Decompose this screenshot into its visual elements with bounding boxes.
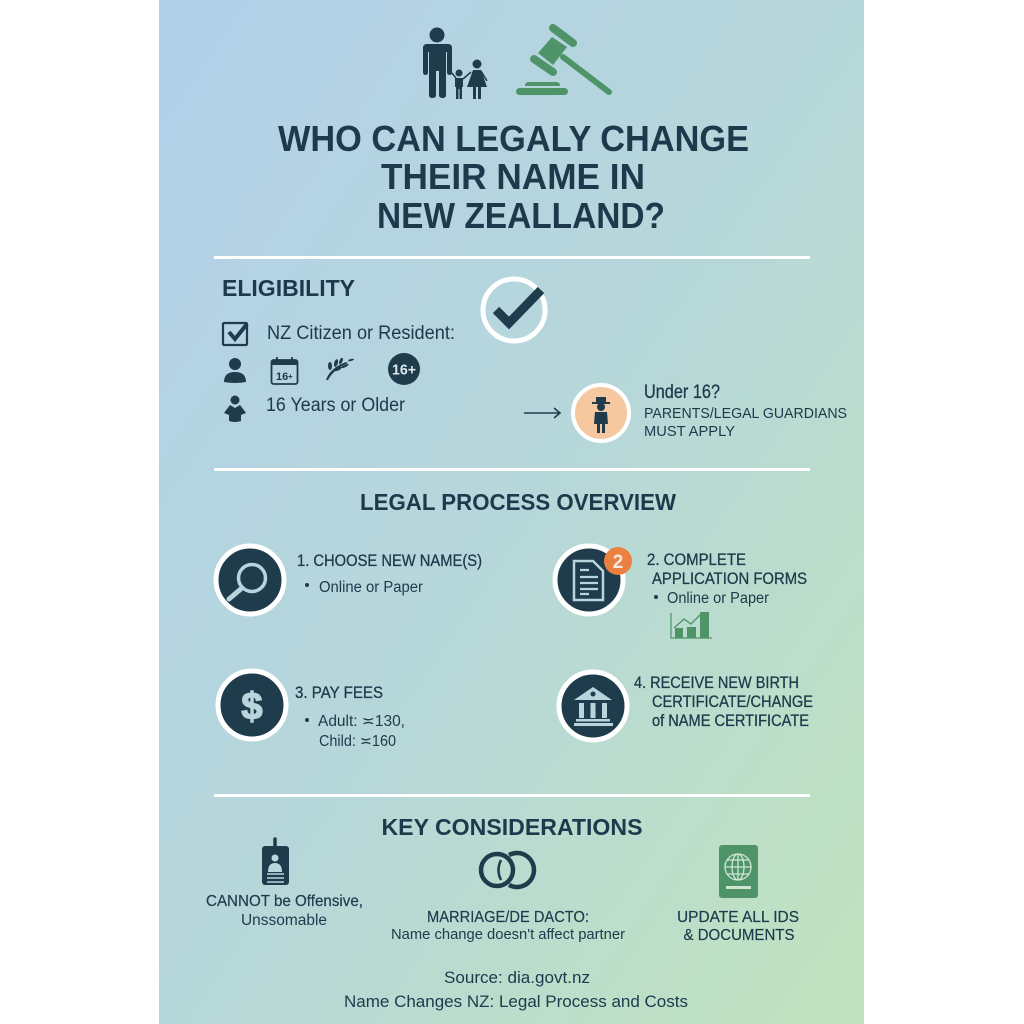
text: step 2: APPLICATION FORMS (652, 570, 807, 588)
text: step 1: 1. CHOOSE NEW NAME(S) (297, 552, 482, 570)
icon: green chart (671, 612, 712, 638)
heading: eligibility: ELIGIBILITY (222, 275, 355, 301)
icon: dollar (218, 671, 286, 739)
icon: child (224, 396, 246, 422)
icon: magnifier (216, 546, 284, 614)
text: cannot (206, 893, 363, 929)
title: WHO CAN LEGALY CHANGE (278, 118, 749, 159)
text: step 2: 2. COMPLETE (647, 551, 746, 569)
background panel (159, 0, 864, 1024)
text: step 4 (634, 674, 813, 730)
text: step 1 (297, 552, 482, 596)
consideration: marriage (391, 853, 625, 943)
text: under 16 (644, 382, 847, 440)
text: marriage: MARRIAGE/DE DACTO: (427, 909, 589, 926)
icon: under 16 child (573, 385, 629, 441)
icon: passport (719, 845, 758, 898)
icon: bank (559, 672, 627, 740)
text: age: 16 Years or Older (266, 395, 406, 416)
heading: legal process overview: LEGAL PROCESS OVERVIEW (360, 489, 676, 515)
consideration: offensive names (206, 839, 363, 929)
badge: 2 (604, 547, 632, 575)
icon: person (224, 358, 246, 383)
icon: rings (481, 853, 534, 887)
consideration: update ids (677, 845, 799, 944)
text: step 1: Online or Paper (319, 579, 423, 596)
badge: 2: 2 (613, 552, 623, 573)
title (278, 118, 749, 236)
icon: dollar: $ (241, 686, 263, 728)
icon: calendar 16 (272, 357, 298, 384)
text: step 4: 4. RECEIVE NEW BIRTH (634, 674, 799, 692)
title: NEW ZEALLAND? (377, 195, 665, 236)
text: step 3 (295, 684, 405, 750)
text: step 4: CERTIFICATE/CHANGE (652, 693, 813, 711)
text: step 3: 3. PAY FEES (295, 684, 383, 702)
step 4 (559, 672, 813, 740)
section: eligibility (222, 275, 455, 422)
icon: document (555, 546, 623, 614)
text: step 3: Adult: ≍130, (318, 713, 405, 730)
text: under 16: Under 16? (644, 382, 720, 403)
icon: id tag (262, 839, 289, 885)
text: marriage: Name change doesn't affect partner (391, 926, 625, 943)
text: update ids (677, 909, 799, 944)
icon: large check (483, 279, 545, 341)
icon: gavel (516, 28, 609, 95)
step 1 (216, 546, 482, 614)
heading: key considerations: KEY CONSIDERATIONS (382, 814, 642, 840)
icon: calendar 16: + (288, 372, 293, 381)
text: step 4: of NAME CERTIFICATE (652, 712, 809, 730)
icon: calendar 16: 16 (276, 371, 288, 383)
badge: 16+: 16+ (392, 362, 416, 378)
step 2 (555, 546, 807, 638)
text: update ids: UPDATE ALL IDS (677, 909, 799, 926)
source footer: Source: dia.govt.nz (444, 968, 590, 987)
icon: family (423, 28, 487, 99)
text: citizen: NZ Citizen or Resident: (267, 323, 455, 344)
text: under 16: MUST APPLY (644, 423, 735, 440)
text: step 2: Online or Paper (667, 590, 769, 607)
step 3 (218, 671, 405, 750)
text: marriage (391, 909, 625, 943)
icon: checkbox (223, 323, 247, 345)
text: update ids: & DOCUMENTS (684, 927, 794, 944)
source footer: Name Changes NZ: Legal Process and Costs (344, 992, 688, 1011)
text: under 16: PARENTS/LEGAL GUARDIANS (644, 405, 847, 422)
text: step 3: Child: ≍160 (319, 733, 396, 750)
icon: fern leaf (326, 357, 354, 380)
badge: 16+ (388, 353, 420, 385)
title: THEIR NAME IN (381, 156, 645, 197)
source footer (344, 968, 688, 1011)
text: cannot: CANNOT be Offensive, (206, 893, 363, 910)
text: cannot: Unssomable (241, 912, 327, 929)
arrow (524, 408, 560, 418)
text: step 2 (647, 551, 807, 607)
